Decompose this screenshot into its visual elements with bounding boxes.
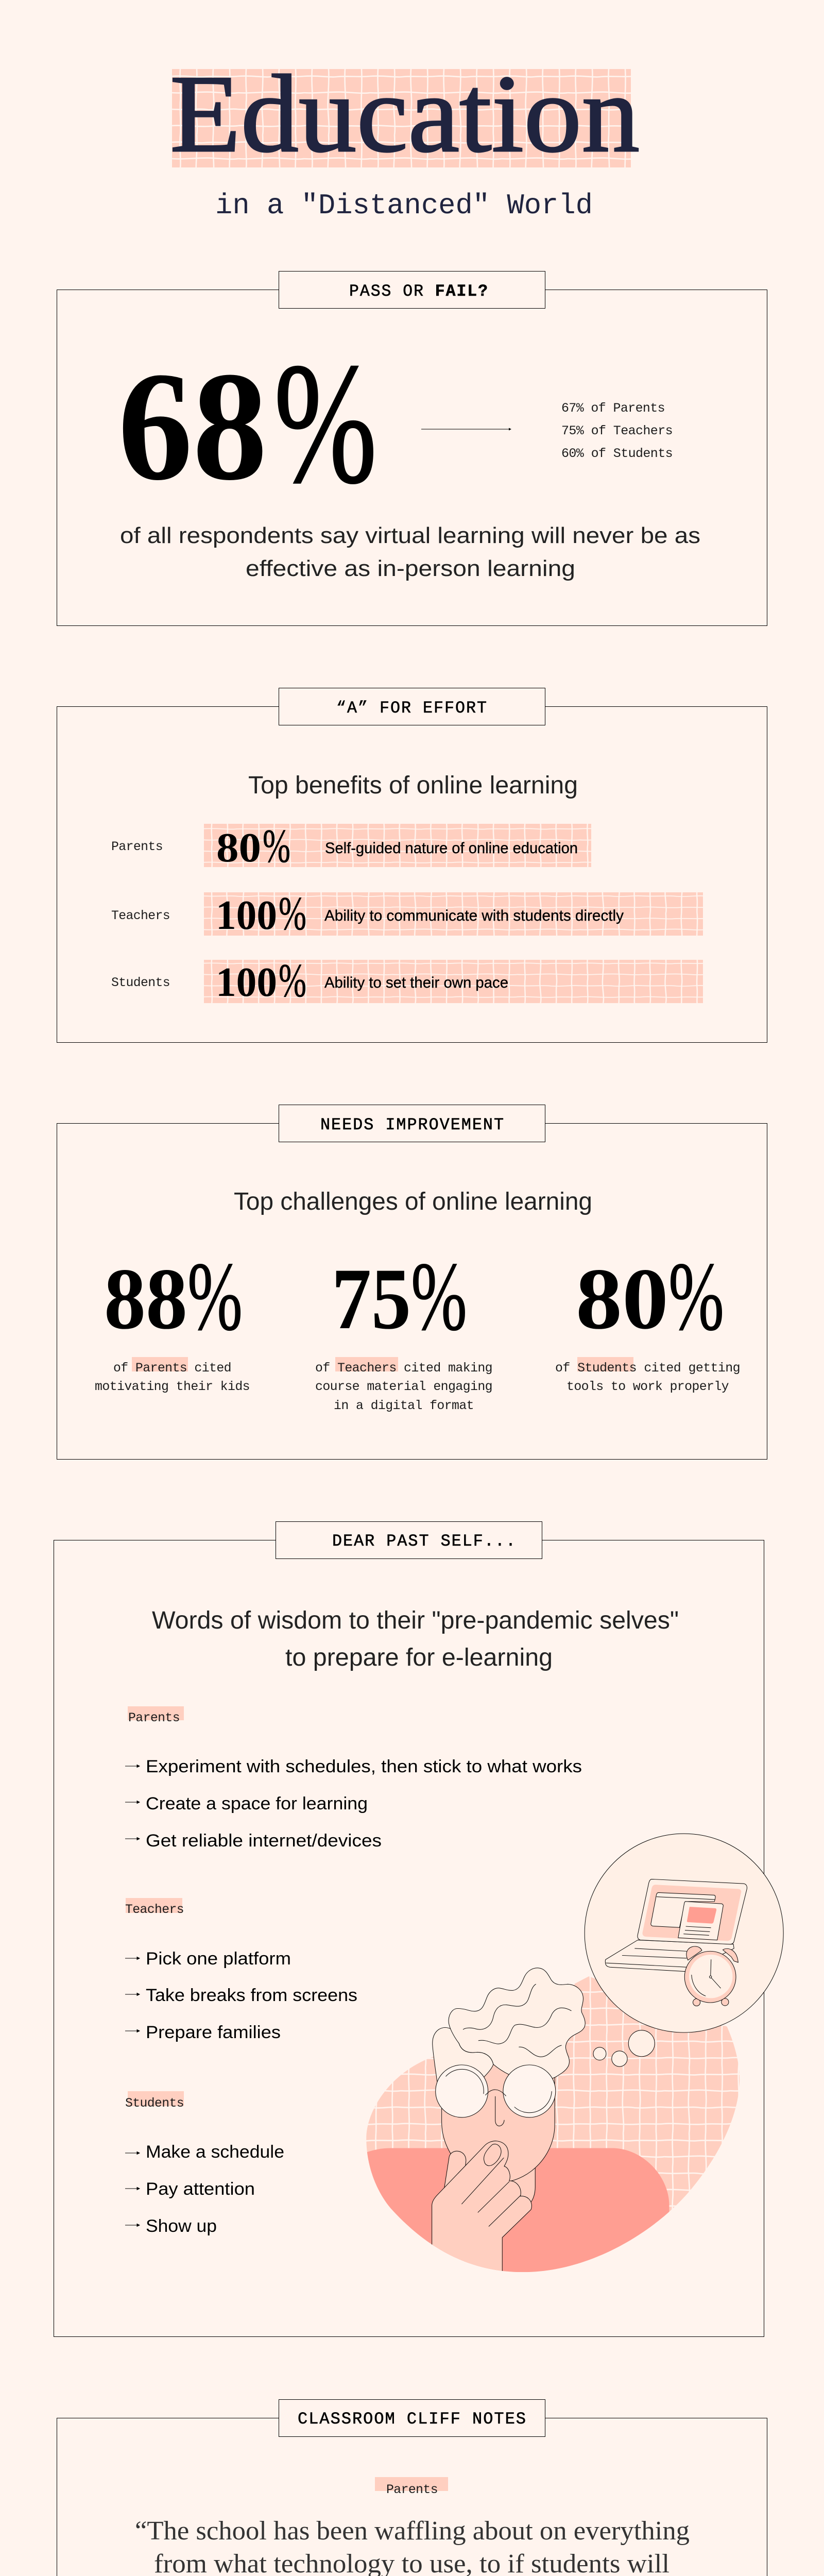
parents advice: Create a space for learning bbox=[146, 1794, 368, 1814]
row: teachers: Ability to communicate with students directly bbox=[324, 907, 624, 924]
teachers advice: Teachers bbox=[125, 1902, 184, 1917]
stat: teachers 75%: of Teachers cited making bbox=[315, 1361, 492, 1376]
stat: parents 88% bbox=[95, 1243, 250, 1394]
row: students: Students bbox=[111, 975, 170, 990]
panel: pass or fail bbox=[57, 271, 767, 625]
stat: students 80%: % bbox=[668, 1243, 724, 1351]
neck bbox=[469, 2166, 535, 2233]
illustration: person thinking about laptop and clock bbox=[363, 1834, 783, 2278]
section tag: dear past self: DEAR PAST SELF... bbox=[332, 1532, 517, 1551]
stat: teachers 75% bbox=[315, 1243, 492, 1413]
row: parents: Parents bbox=[111, 839, 163, 854]
row: teachers: % bbox=[279, 887, 306, 940]
quote: parents: “The school has been waffling about on everything bbox=[135, 2516, 690, 2546]
section tag: pass or fail bbox=[279, 271, 545, 308]
breakdown list: 67% of Parents bbox=[561, 401, 665, 416]
stat: students 80% bbox=[555, 1243, 740, 1394]
section tag: needs improvement bbox=[279, 1105, 545, 1142]
panel: needs improvement bbox=[57, 1105, 767, 1459]
shirt bbox=[363, 2148, 669, 2278]
students advice: Pay attention bbox=[146, 2179, 255, 2199]
panel: dear past self bbox=[54, 1522, 783, 2337]
arrow bbox=[421, 428, 511, 431]
section tag: classroom cliff notes: CLASSROOM CLIFF NOTES bbox=[298, 2410, 527, 2429]
teachers advice: Pick one platform bbox=[146, 1949, 291, 1969]
breakdown list: 75% of Teachers bbox=[561, 423, 673, 438]
stat: teachers 75%: in a digital format bbox=[334, 1398, 474, 1413]
blob with grid bbox=[366, 1976, 740, 2272]
stat: students 80%: 80 bbox=[576, 1250, 668, 1347]
stat: students 80%: of Students cited getting bbox=[555, 1361, 740, 1376]
panel: A for effort bbox=[57, 688, 767, 1043]
students advice: Make a schedule bbox=[146, 2142, 284, 2162]
row: teachers: Teachers bbox=[111, 908, 170, 923]
teachers advice bbox=[125, 1898, 357, 2042]
header: title block bbox=[170, 52, 640, 222]
students advice bbox=[125, 2091, 284, 2236]
big stat 68%: % bbox=[274, 328, 377, 519]
row: parents: Self-guided nature of online education bbox=[325, 840, 578, 857]
row: teachers bbox=[111, 887, 703, 940]
big stat 68%: 68 bbox=[118, 340, 267, 513]
title: Education bbox=[170, 52, 640, 175]
stat: parents 88%: % bbox=[187, 1243, 243, 1351]
section tag: classroom cliff notes bbox=[279, 2400, 545, 2437]
caption: effective as in-person learning bbox=[246, 556, 575, 581]
heading: top benefits: Top benefits of online learning bbox=[248, 772, 578, 799]
teachers advice: Take breaks from screens bbox=[146, 1986, 357, 2005]
row: students: Ability to set their own pace bbox=[324, 974, 508, 991]
icon: alarm clock bbox=[684, 1946, 738, 2006]
section tag: dear past self bbox=[276, 1522, 542, 1559]
stat: teachers 75%: 75 bbox=[332, 1250, 411, 1347]
students advice: Show up bbox=[146, 2216, 217, 2236]
row: parents bbox=[111, 820, 591, 872]
breakdown list bbox=[561, 401, 673, 461]
row: students: 100 bbox=[216, 960, 277, 1005]
heading: words of wisdom: Words of wisdom to their "pre-pandemic selves" bbox=[152, 1607, 679, 1634]
big stat 68% bbox=[118, 328, 377, 519]
heading: words of wisdom: to prepare for e-learning bbox=[285, 1644, 553, 1671]
caption: of all respondents say virtual learning will never be as bbox=[120, 523, 700, 548]
breakdown list: 60% of Students bbox=[561, 446, 673, 461]
quote: parents bbox=[135, 2477, 690, 2576]
row: parents: 80 bbox=[216, 825, 261, 871]
parents advice: Parents bbox=[128, 1710, 180, 1725]
parents advice bbox=[125, 1706, 582, 1851]
hair bbox=[433, 1968, 585, 2084]
stat: students 80%: tools to work properly bbox=[566, 1379, 729, 1394]
panel: classroom cliff notes bbox=[57, 2400, 767, 2576]
hand bbox=[432, 2141, 531, 2278]
parents advice: Experiment with schedules, then stick to what works bbox=[146, 1757, 582, 1776]
students advice: Students bbox=[125, 2096, 184, 2111]
row: students bbox=[111, 954, 703, 1007]
title highlight grid bbox=[172, 69, 631, 167]
section tag: needs improvement: NEEDS IMPROVEMENT bbox=[320, 1115, 505, 1134]
caption bbox=[120, 523, 700, 581]
row: teachers: 100 bbox=[216, 893, 277, 938]
glasses bbox=[436, 2065, 556, 2126]
thought bubbles bbox=[585, 1834, 783, 2066]
stat: parents 88%: 88 bbox=[104, 1250, 187, 1347]
face bbox=[442, 2055, 555, 2182]
heading: words of wisdom bbox=[152, 1607, 679, 1671]
teachers advice: Prepare families bbox=[146, 2023, 281, 2042]
icon: laptop bbox=[605, 1879, 747, 1972]
stat: parents 88%: of Parents cited bbox=[113, 1361, 231, 1376]
heading: top challenges: Top challenges of online learning bbox=[234, 1188, 592, 1215]
subtitle: in a "Distanced" World bbox=[215, 189, 593, 222]
parents advice: Get reliable internet/devices bbox=[146, 1831, 382, 1851]
stat: teachers 75%: course material engaging bbox=[315, 1379, 492, 1394]
row: parents: % bbox=[263, 820, 290, 872]
stat: parents 88%: motivating their kids bbox=[95, 1379, 250, 1394]
section tag: pass or fail: PASS OR FAIL? bbox=[349, 282, 489, 301]
row: students: % bbox=[279, 954, 306, 1007]
section tag: A for effort bbox=[279, 688, 545, 725]
section tag: A for effort: “A” FOR EFFORT bbox=[336, 699, 488, 718]
quote: parents: Parents bbox=[386, 2482, 438, 2497]
stat: teachers 75%: % bbox=[411, 1243, 467, 1351]
